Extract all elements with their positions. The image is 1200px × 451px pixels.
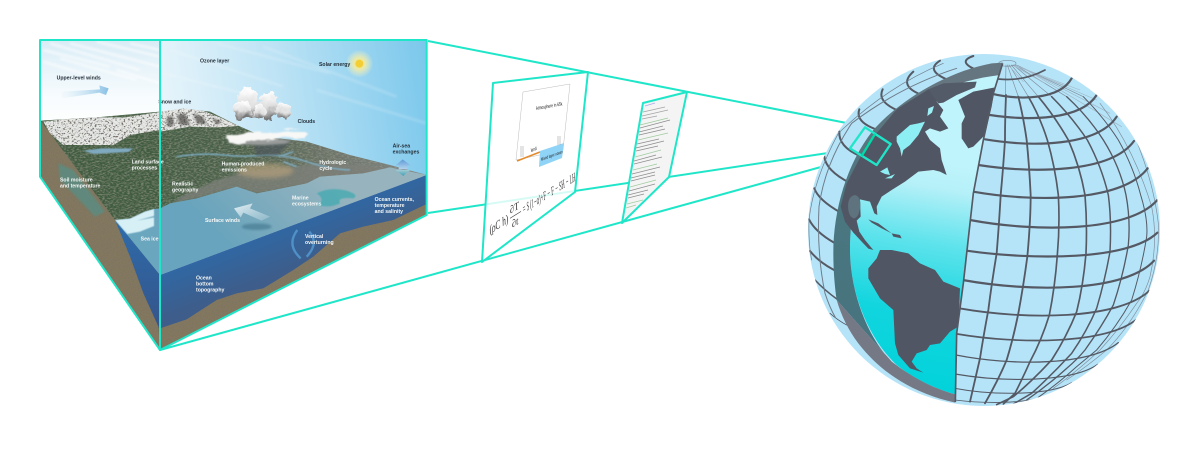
Caribbean islands <box>868 219 902 238</box>
label: soil moisture and temperature: Soil moisture <box>60 177 93 183</box>
arrow: surface winds <box>234 203 270 221</box>
label: realistic geography: geography <box>172 188 198 194</box>
label: air-sea exchanges: exchanges <box>393 150 419 156</box>
label: ocean bottom topography: Ocean <box>196 276 212 282</box>
label: soil moisture and temperature: and temperature <box>60 183 101 189</box>
cut-out: lower grey wedge <box>837 300 955 403</box>
baja atmosphere patch <box>848 195 860 218</box>
sun <box>346 50 372 77</box>
label: ozone layer: Ozone layer <box>200 59 229 65</box>
label: ocean currents: and salinity <box>375 209 403 215</box>
label: vertical overturning: Vertical <box>305 234 323 240</box>
label: clouds: Clouds <box>298 119 315 125</box>
sea ice remainder <box>154 208 159 227</box>
label: vertical overturning: overturning <box>305 240 334 246</box>
grid lines: left hemisphere <box>809 56 977 325</box>
label: air-sea exchanges: Air-sea <box>393 144 410 150</box>
left face of the block <box>40 40 160 350</box>
label: snow and ice: Snow and ice <box>158 100 191 106</box>
label: ocean bottom topography: bottom <box>196 282 214 288</box>
cut-out: ocean core <box>850 75 1000 394</box>
equation: (ρC h) <box>488 211 509 237</box>
panel: equation card: = S (1−α)+F − F − SH − LH <box>522 169 577 216</box>
right face of the block <box>154 40 427 350</box>
coastal lowlands <box>173 164 423 202</box>
rivers and inlets <box>177 152 350 170</box>
arrows: air-sea exchange <box>396 159 411 176</box>
ocean surface <box>160 167 427 275</box>
equation <box>488 165 578 244</box>
mixed layer ocean box: Mixed layer ocean <box>541 149 563 162</box>
label: realistic geography: Realistic <box>172 182 193 188</box>
panel frame <box>40 40 427 350</box>
panel: code card <box>622 92 687 223</box>
deep ocean section <box>160 175 427 330</box>
label: ocean bottom topography: topography <box>196 288 224 294</box>
globe <box>808 54 1160 406</box>
cumulus cloud <box>232 88 291 119</box>
Hudson Bay <box>897 122 925 157</box>
emissions smudge <box>237 163 293 178</box>
panel: equation card <box>482 72 588 262</box>
label: human-produced emissions: emissions <box>222 168 247 174</box>
labels <box>57 59 419 294</box>
cut-out: atmosphere band <box>833 63 1003 362</box>
label: ocean currents: temperature <box>375 203 405 209</box>
parallels <box>955 70 1157 402</box>
arrow: surface wind shadow <box>242 223 272 230</box>
equation: ∂T <box>509 199 521 217</box>
Greenland <box>958 87 995 148</box>
label: marine ecosystems: ecosystems <box>292 201 322 207</box>
diagram: atmosphere box model <box>516 84 570 167</box>
rain cloud <box>225 130 307 156</box>
continent: South America <box>868 250 960 373</box>
grid lines: right hemisphere <box>809 56 1159 405</box>
panel: climate processes block <box>40 40 427 350</box>
globe sphere <box>808 54 1160 406</box>
connector lines <box>160 41 867 350</box>
limb meridians <box>1053 103 1159 388</box>
equation: ∂t <box>511 216 519 231</box>
ocean floor <box>160 204 427 350</box>
small Great Lakes <box>880 167 895 178</box>
label: hydrologic cycle: Hydrologic <box>319 160 346 166</box>
marine ecosystem patches <box>317 189 356 206</box>
label: land surface processes: processes <box>132 166 157 172</box>
Foxe basin notch <box>927 106 934 116</box>
label: solar energy: Solar energy <box>319 62 350 68</box>
label: sea ice: Sea ice <box>141 236 159 242</box>
diagram title: Atmosphere in 65k <box>536 101 563 112</box>
label: human-produced emissions: Human-produced <box>222 162 264 168</box>
cut edge <box>955 63 1003 402</box>
continent: North America and Central America <box>841 85 957 250</box>
meridians <box>970 95 1147 405</box>
upper-level wind arrow <box>62 85 109 98</box>
label: surface winds: Surface winds <box>205 218 240 224</box>
land strip <box>517 152 540 161</box>
label: ocean currents: Ocean currents, <box>375 197 414 203</box>
label: marine ecosystems: Marine <box>292 195 309 201</box>
Arctic islands <box>928 82 977 103</box>
code lines <box>626 103 670 208</box>
thin polar meridians <box>999 60 1122 127</box>
land label: land <box>531 146 537 154</box>
arrows: vertical overturning <box>292 230 314 258</box>
mountains <box>160 108 238 132</box>
label: land surface processes: Land surface <box>132 160 164 166</box>
label: hydrologic cycle: cycle <box>319 166 332 172</box>
label: upper-level winds: Upper-level winds <box>57 75 101 81</box>
selected grid box <box>850 127 891 165</box>
